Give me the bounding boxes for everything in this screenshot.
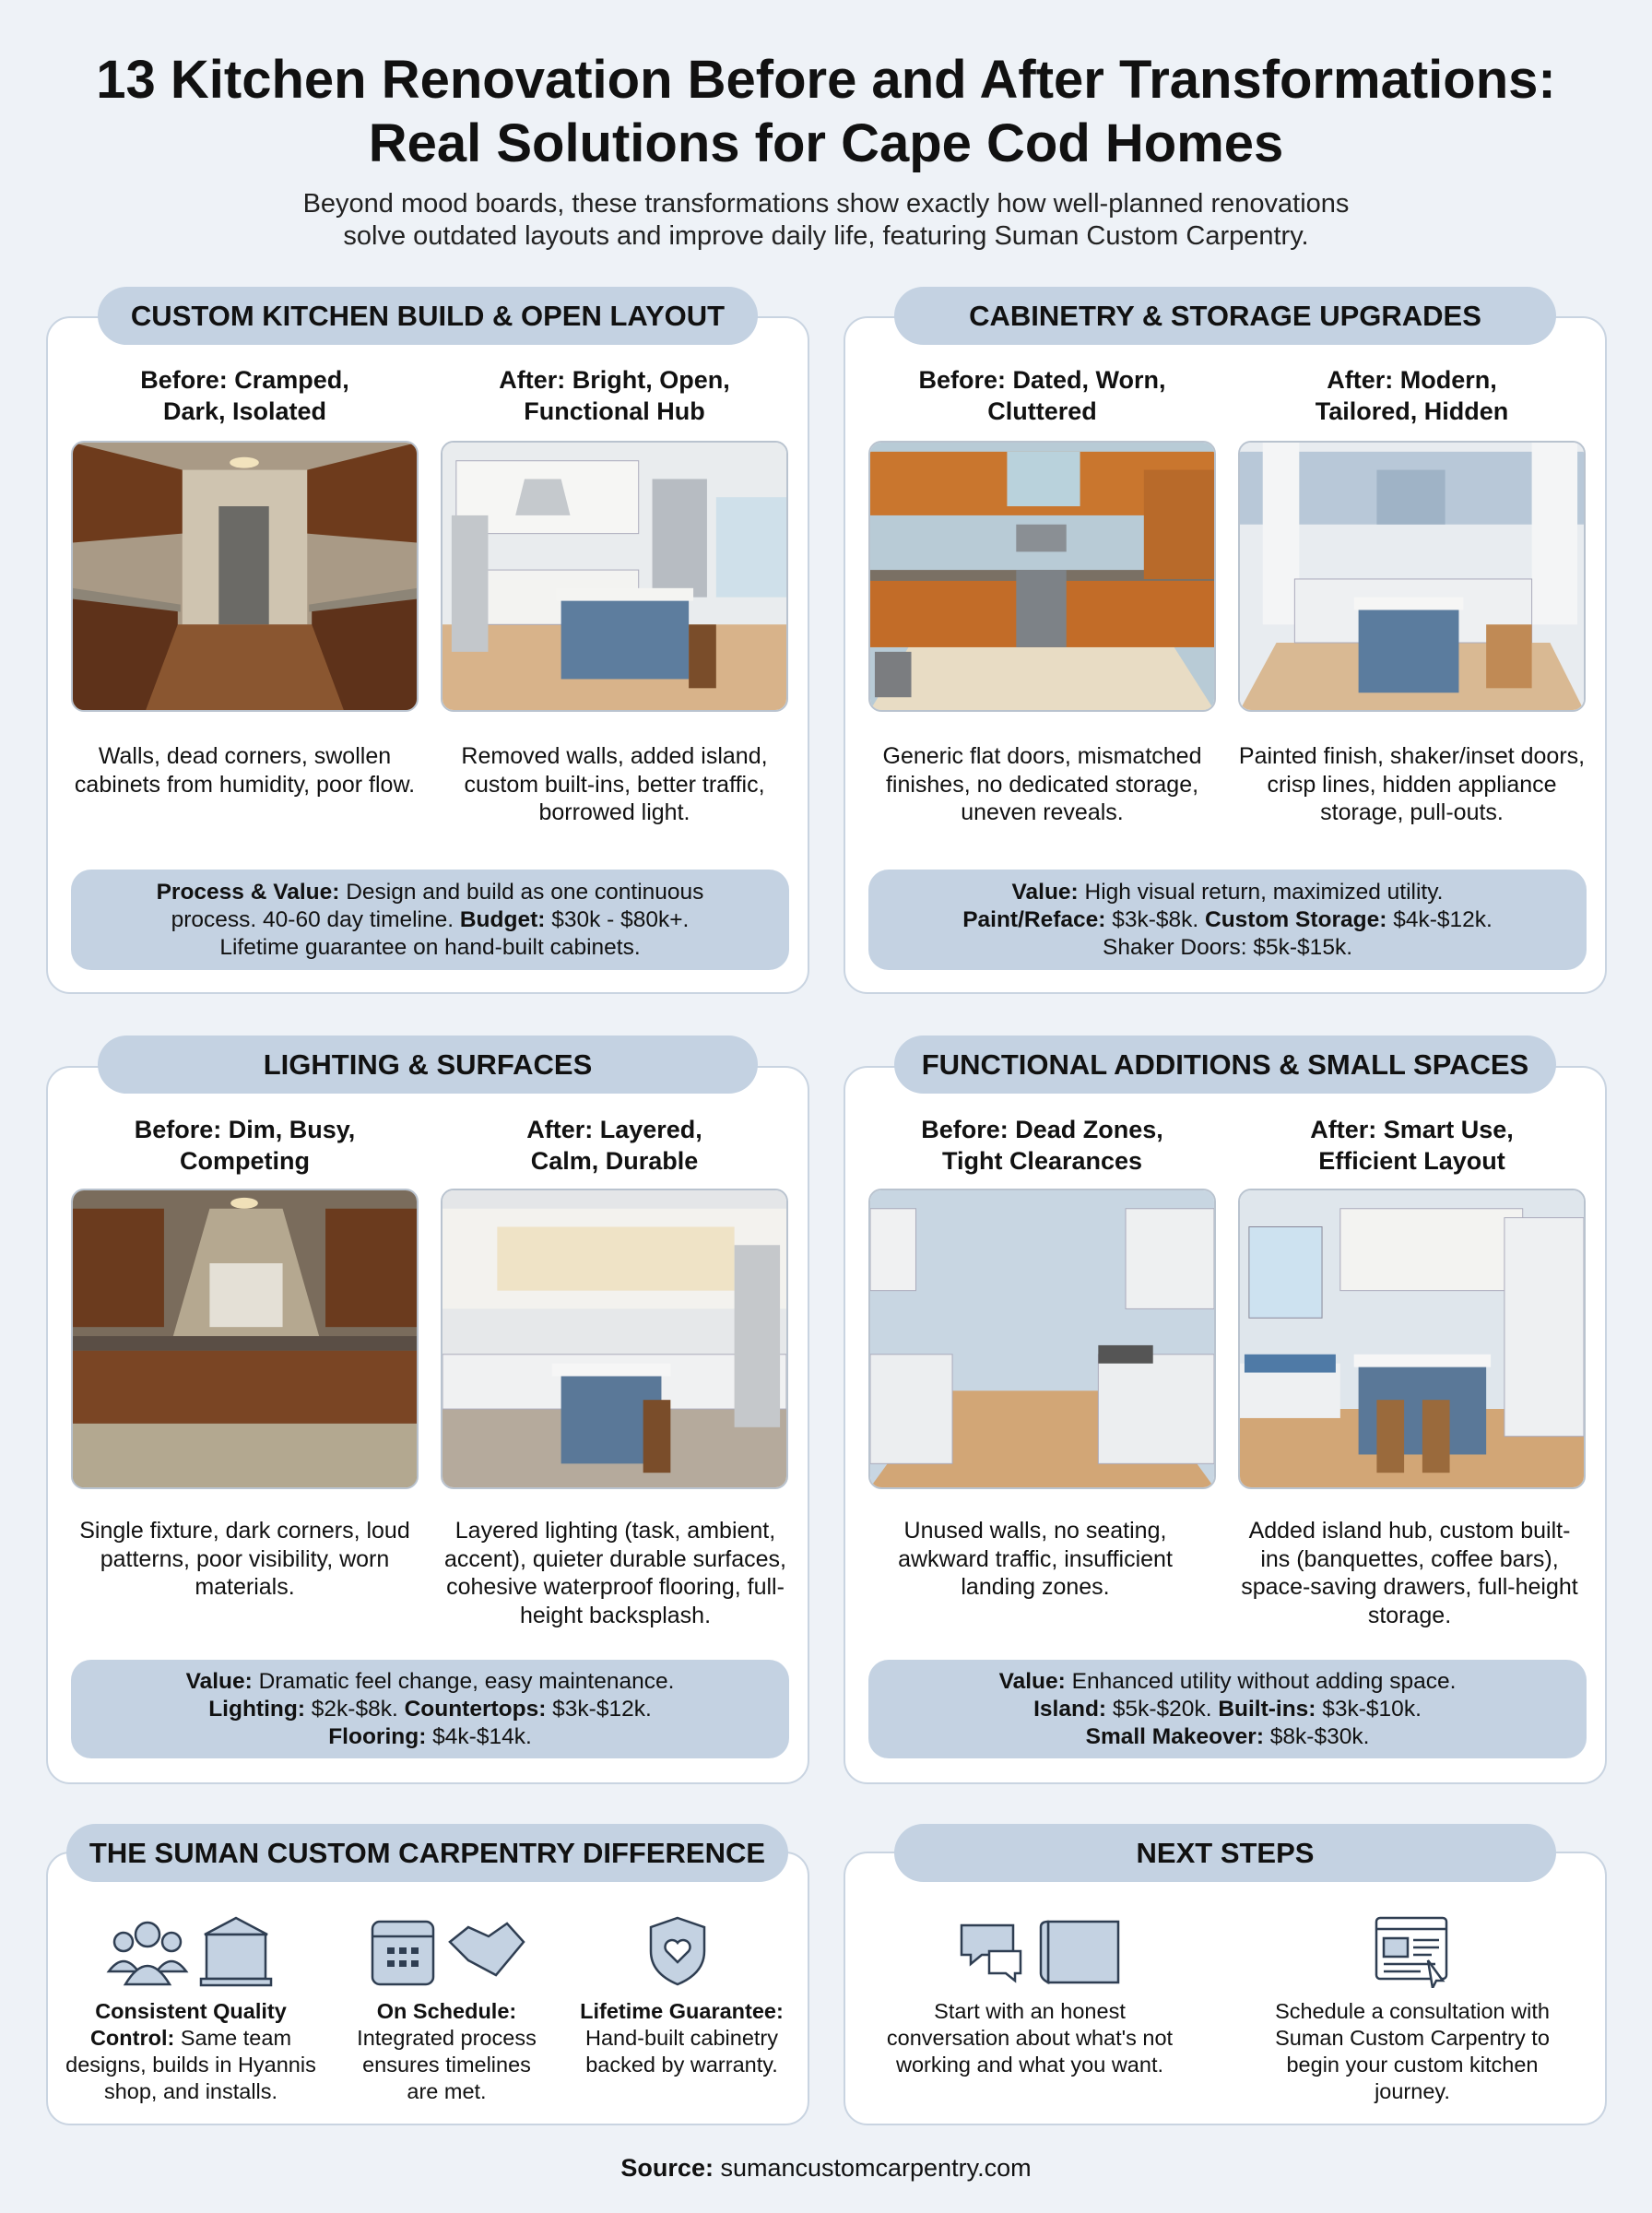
- value box: Process & Value: Design and build as one continuous: [157, 880, 703, 904]
- pill header: custom kitchen build: CUSTOM KITCHEN BUILD & OPEN LAYOUT: [131, 300, 725, 332]
- pill header: difference: THE SUMAN CUSTOM CARPENTRY DIFFERENCE: [89, 1837, 765, 1869]
- image: after painted cabinets: [1238, 441, 1586, 712]
- column heading: after: Efficient Layout: [1318, 1147, 1505, 1175]
- value box: [868, 1660, 1587, 1758]
- value box: Small Makeover: $8k-$30k.: [1086, 1724, 1369, 1748]
- column heading: after: [526, 1116, 702, 1175]
- panel: custom kitchen build: [46, 316, 809, 994]
- title: [96, 50, 1556, 173]
- image: before dark kitchen: [71, 441, 419, 712]
- column heading: before: Dark, Isolated: [163, 397, 326, 425]
- value box: Lifetime guarantee on hand-built cabinets.: [219, 935, 641, 959]
- text: schedule consultation: Schedule a consultation with Suman Custom Carpentry to begin your custom kitchen journey.: [1275, 1999, 1550, 2103]
- description: after: Layered lighting (task, ambient, accent), quieter durable surfaces, cohesive waterproof flooring, full-height backsplash.: [444, 1518, 786, 1628]
- column heading: after: Functional Hub: [524, 397, 705, 425]
- column heading: after: [1316, 366, 1508, 425]
- description: before: Unused walls, no seating, awkward traffic, insufficient landing zones.: [898, 1518, 1173, 1600]
- column heading: before: Cluttered: [987, 397, 1097, 425]
- pill header: cabinetry: CABINETRY & STORAGE UPGRADES: [969, 300, 1481, 332]
- description: after: Painted finish, shaker/inset doors, crisp lines, hidden appliance storage, pull-outs.: [1239, 743, 1585, 825]
- column heading: after: After: Layered,: [526, 1116, 702, 1143]
- image: after efficient layout: [1238, 1189, 1586, 1489]
- description: before: Single fixture, dark corners, loud patterns, poor visibility, worn materials.: [79, 1518, 410, 1600]
- icon: calendar and handshake: [371, 1920, 525, 1986]
- value box: Flooring: $4k-$14k.: [328, 1724, 532, 1748]
- value box: Paint/Reface: $3k-$8k. Custom Storage: $4k-$12k.: [962, 907, 1493, 931]
- panel: difference: [46, 1852, 809, 2125]
- column heading: before: Before: Dated, Worn,: [918, 366, 1166, 394]
- value box: Shaker Doors: $5k-$15k.: [1103, 935, 1352, 959]
- column heading: after: After: Modern,: [1327, 366, 1497, 394]
- column heading: after: [499, 366, 730, 425]
- value box: Value: High visual return, maximized utility.: [1012, 880, 1443, 904]
- icon: team and shop: [107, 1916, 273, 1986]
- icon: web form: [1375, 1916, 1447, 1988]
- column heading: after: Tailored, Hidden: [1316, 397, 1508, 425]
- icon: shield heart: [649, 1916, 706, 1986]
- column heading: before: [135, 1116, 355, 1175]
- panel: cabinetry: [844, 316, 1607, 994]
- column heading: before: Before: Dead Zones,: [921, 1116, 1163, 1143]
- icon: chat and blueprint: [961, 1920, 1119, 1984]
- column heading: before: Before: Cramped,: [140, 366, 349, 394]
- description: before: Generic flat doors, mismatched finishes, no dedicated storage, uneven reveals.: [883, 743, 1201, 825]
- pill header: cabinetry: [894, 287, 1556, 345]
- pill header: functional additions: FUNCTIONAL ADDITIONS & SMALL SPACES: [922, 1048, 1528, 1081]
- value box: [71, 870, 789, 970]
- title: Real Solutions for Cape Cod Homes: [369, 113, 1283, 173]
- value box: Island: $5k-$20k. Built-ins: $3k-$10k.: [1033, 1697, 1422, 1721]
- feature: guarantee: Lifetime Guarantee: Hand-built cabinetry backed by warranty.: [580, 1999, 784, 2077]
- column heading: after: [1310, 1116, 1514, 1175]
- pill header: custom kitchen build: [98, 287, 758, 345]
- panel: functional additions: [844, 1066, 1607, 1784]
- description: after: Removed walls, added island, custom built-ins, better traffic, borrowed light.: [461, 743, 768, 825]
- value box: [868, 870, 1587, 970]
- image: after bright kitchen: [441, 441, 788, 712]
- text: start conversation: Start with an honest conversation about what's not working and what you want.: [887, 1999, 1173, 2077]
- image: before orange cabinets: [868, 441, 1216, 712]
- pill header: lighting: LIGHTING & SURFACES: [264, 1048, 592, 1081]
- column heading: after: Calm, Durable: [531, 1147, 698, 1175]
- value box: Lighting: $2k-$8k. Countertops: $3k-$12k.: [208, 1697, 652, 1721]
- pill header: next steps: [894, 1824, 1556, 1882]
- feature: quality: Consistent Quality Control: Same team designs, builds in Hyannis shop, and installs.: [65, 1999, 316, 2103]
- pill header: difference: [66, 1824, 788, 1882]
- column heading: before: [918, 366, 1166, 425]
- description: after: Added island hub, custom built-ins (banquettes, coffee bars), space-saving drawers, full-height storage.: [1241, 1518, 1578, 1628]
- description: before: Walls, dead corners, swollen cabinets from humidity, poor flow.: [75, 743, 415, 797]
- source: Source: sumancustomcarpentry.com: [620, 2154, 1032, 2182]
- column heading: before: Competing: [180, 1147, 310, 1175]
- value box: [71, 1660, 789, 1758]
- subtitle: Beyond mood boards, these transformations show exactly how well-planned renovations: [303, 189, 1349, 219]
- subtitle: solve outdated layouts and improve daily life, featuring Suman Custom Carpentry.: [343, 221, 1309, 251]
- image: before dim kitchen: [71, 1189, 419, 1489]
- pill header: next steps: NEXT STEPS: [1137, 1837, 1314, 1869]
- panel: next steps: [844, 1852, 1607, 2125]
- subtitle: [303, 189, 1349, 251]
- feature: schedule: On Schedule: Integrated process ensures timelines are met.: [357, 1999, 537, 2103]
- image: after layered lighting: [441, 1189, 788, 1489]
- value box: process. 40-60 day timeline. Budget: $30k - $80k+.: [171, 907, 689, 931]
- column heading: before: Tight Clearances: [942, 1147, 1142, 1175]
- value box: Value: Enhanced utility without adding space.: [999, 1669, 1456, 1693]
- column heading: before: [921, 1116, 1163, 1175]
- column heading: after: After: Bright, Open,: [499, 366, 730, 394]
- image: before empty kitchen: [868, 1189, 1216, 1489]
- pill header: functional additions: [894, 1035, 1556, 1094]
- value box: Value: Dramatic feel change, easy maintenance.: [186, 1669, 674, 1693]
- column heading: before: [140, 366, 349, 425]
- panel: lighting: [46, 1066, 809, 1784]
- column heading: after: After: Smart Use,: [1310, 1116, 1514, 1143]
- pill header: lighting: [98, 1035, 758, 1094]
- title: 13 Kitchen Renovation Before and After Transformations:: [96, 50, 1556, 110]
- column heading: before: Before: Dim, Busy,: [135, 1116, 355, 1143]
